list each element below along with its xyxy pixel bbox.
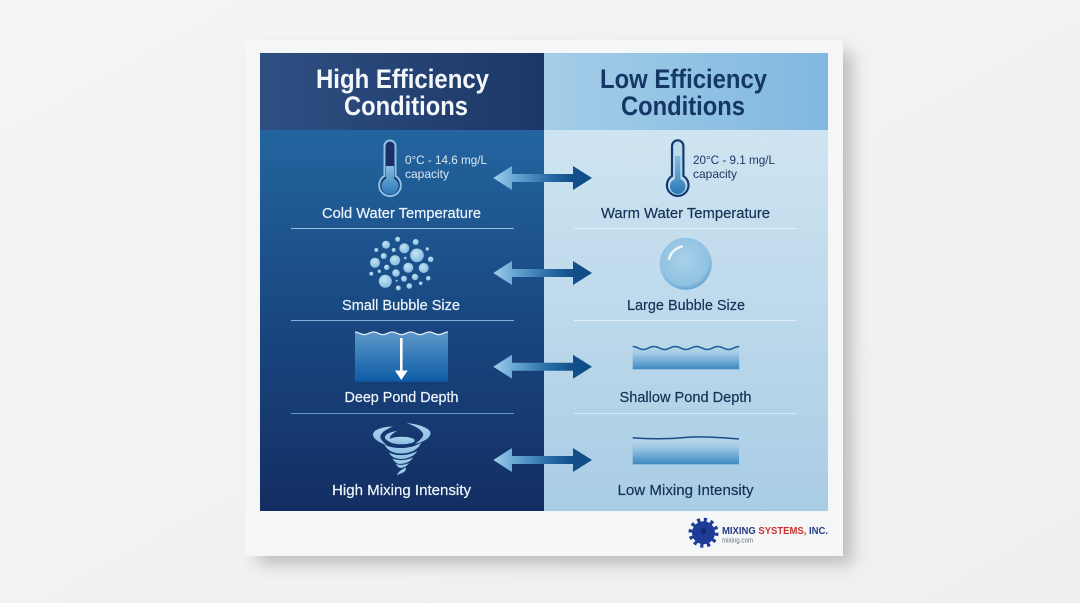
icon: cold thermometer — [379, 140, 401, 196]
poster sheet — [245, 40, 843, 556]
label: cold water temperature: Cold Water Temperature — [322, 205, 481, 222]
label: high mixing intensity: High Mixing Intensity — [332, 482, 471, 499]
arrow: mixing intensity comparison — [493, 448, 592, 472]
header band: low efficiency: Low Efficiency — [600, 64, 767, 94]
label: small bubble size: Small Bubble Size — [342, 297, 460, 314]
logo: mixing systems — [691, 520, 828, 545]
arrow: temperature comparison — [493, 166, 592, 190]
header band: low efficiency: Conditions — [621, 91, 745, 121]
panel: high efficiency conditions — [260, 53, 544, 511]
label: large bubble size: Large Bubble Size — [627, 297, 745, 314]
icon: warm thermometer — [667, 140, 688, 196]
logo url: mixing.com — [722, 538, 753, 544]
header band: high efficiency — [260, 53, 544, 130]
logo icon: gear — [691, 520, 716, 545]
icon: small bubbles — [369, 237, 434, 290]
label: deep pond depth: Deep Pond Depth — [344, 389, 458, 406]
text: warm capacity: capacity — [693, 167, 737, 181]
arrow: pond depth comparison — [493, 355, 592, 379]
header band: high efficiency: High Efficiency — [316, 64, 489, 94]
logo wordmark: MIXING SYSTEMS, INC. — [722, 525, 828, 537]
label: shallow pond depth: Shallow Pond Depth — [620, 389, 752, 406]
header band: high efficiency: Conditions — [344, 91, 468, 121]
panel: low efficiency conditions — [544, 53, 828, 511]
icon: deep pond with down arrow — [355, 332, 448, 382]
icon: shallow pond — [633, 346, 739, 369]
header band: low efficiency — [544, 53, 828, 130]
arrow: bubble size comparison — [493, 261, 592, 285]
label: low mixing intensity: Low Mixing Intensity — [618, 482, 754, 499]
text: cold capacity: capacity — [405, 167, 449, 181]
icon: calm water low mixing — [633, 437, 739, 464]
label: warm water temperature: Warm Water Temperature — [601, 205, 770, 222]
icon: tornado — [373, 423, 431, 476]
text: warm capacity — [693, 153, 775, 181]
text: warm capacity: 20°C - 9.1 mg/L — [693, 153, 775, 167]
text: cold capacity — [405, 153, 487, 181]
text: cold capacity: 0°C - 14.6 mg/L — [405, 153, 487, 167]
icon: large bubble — [660, 238, 712, 290]
